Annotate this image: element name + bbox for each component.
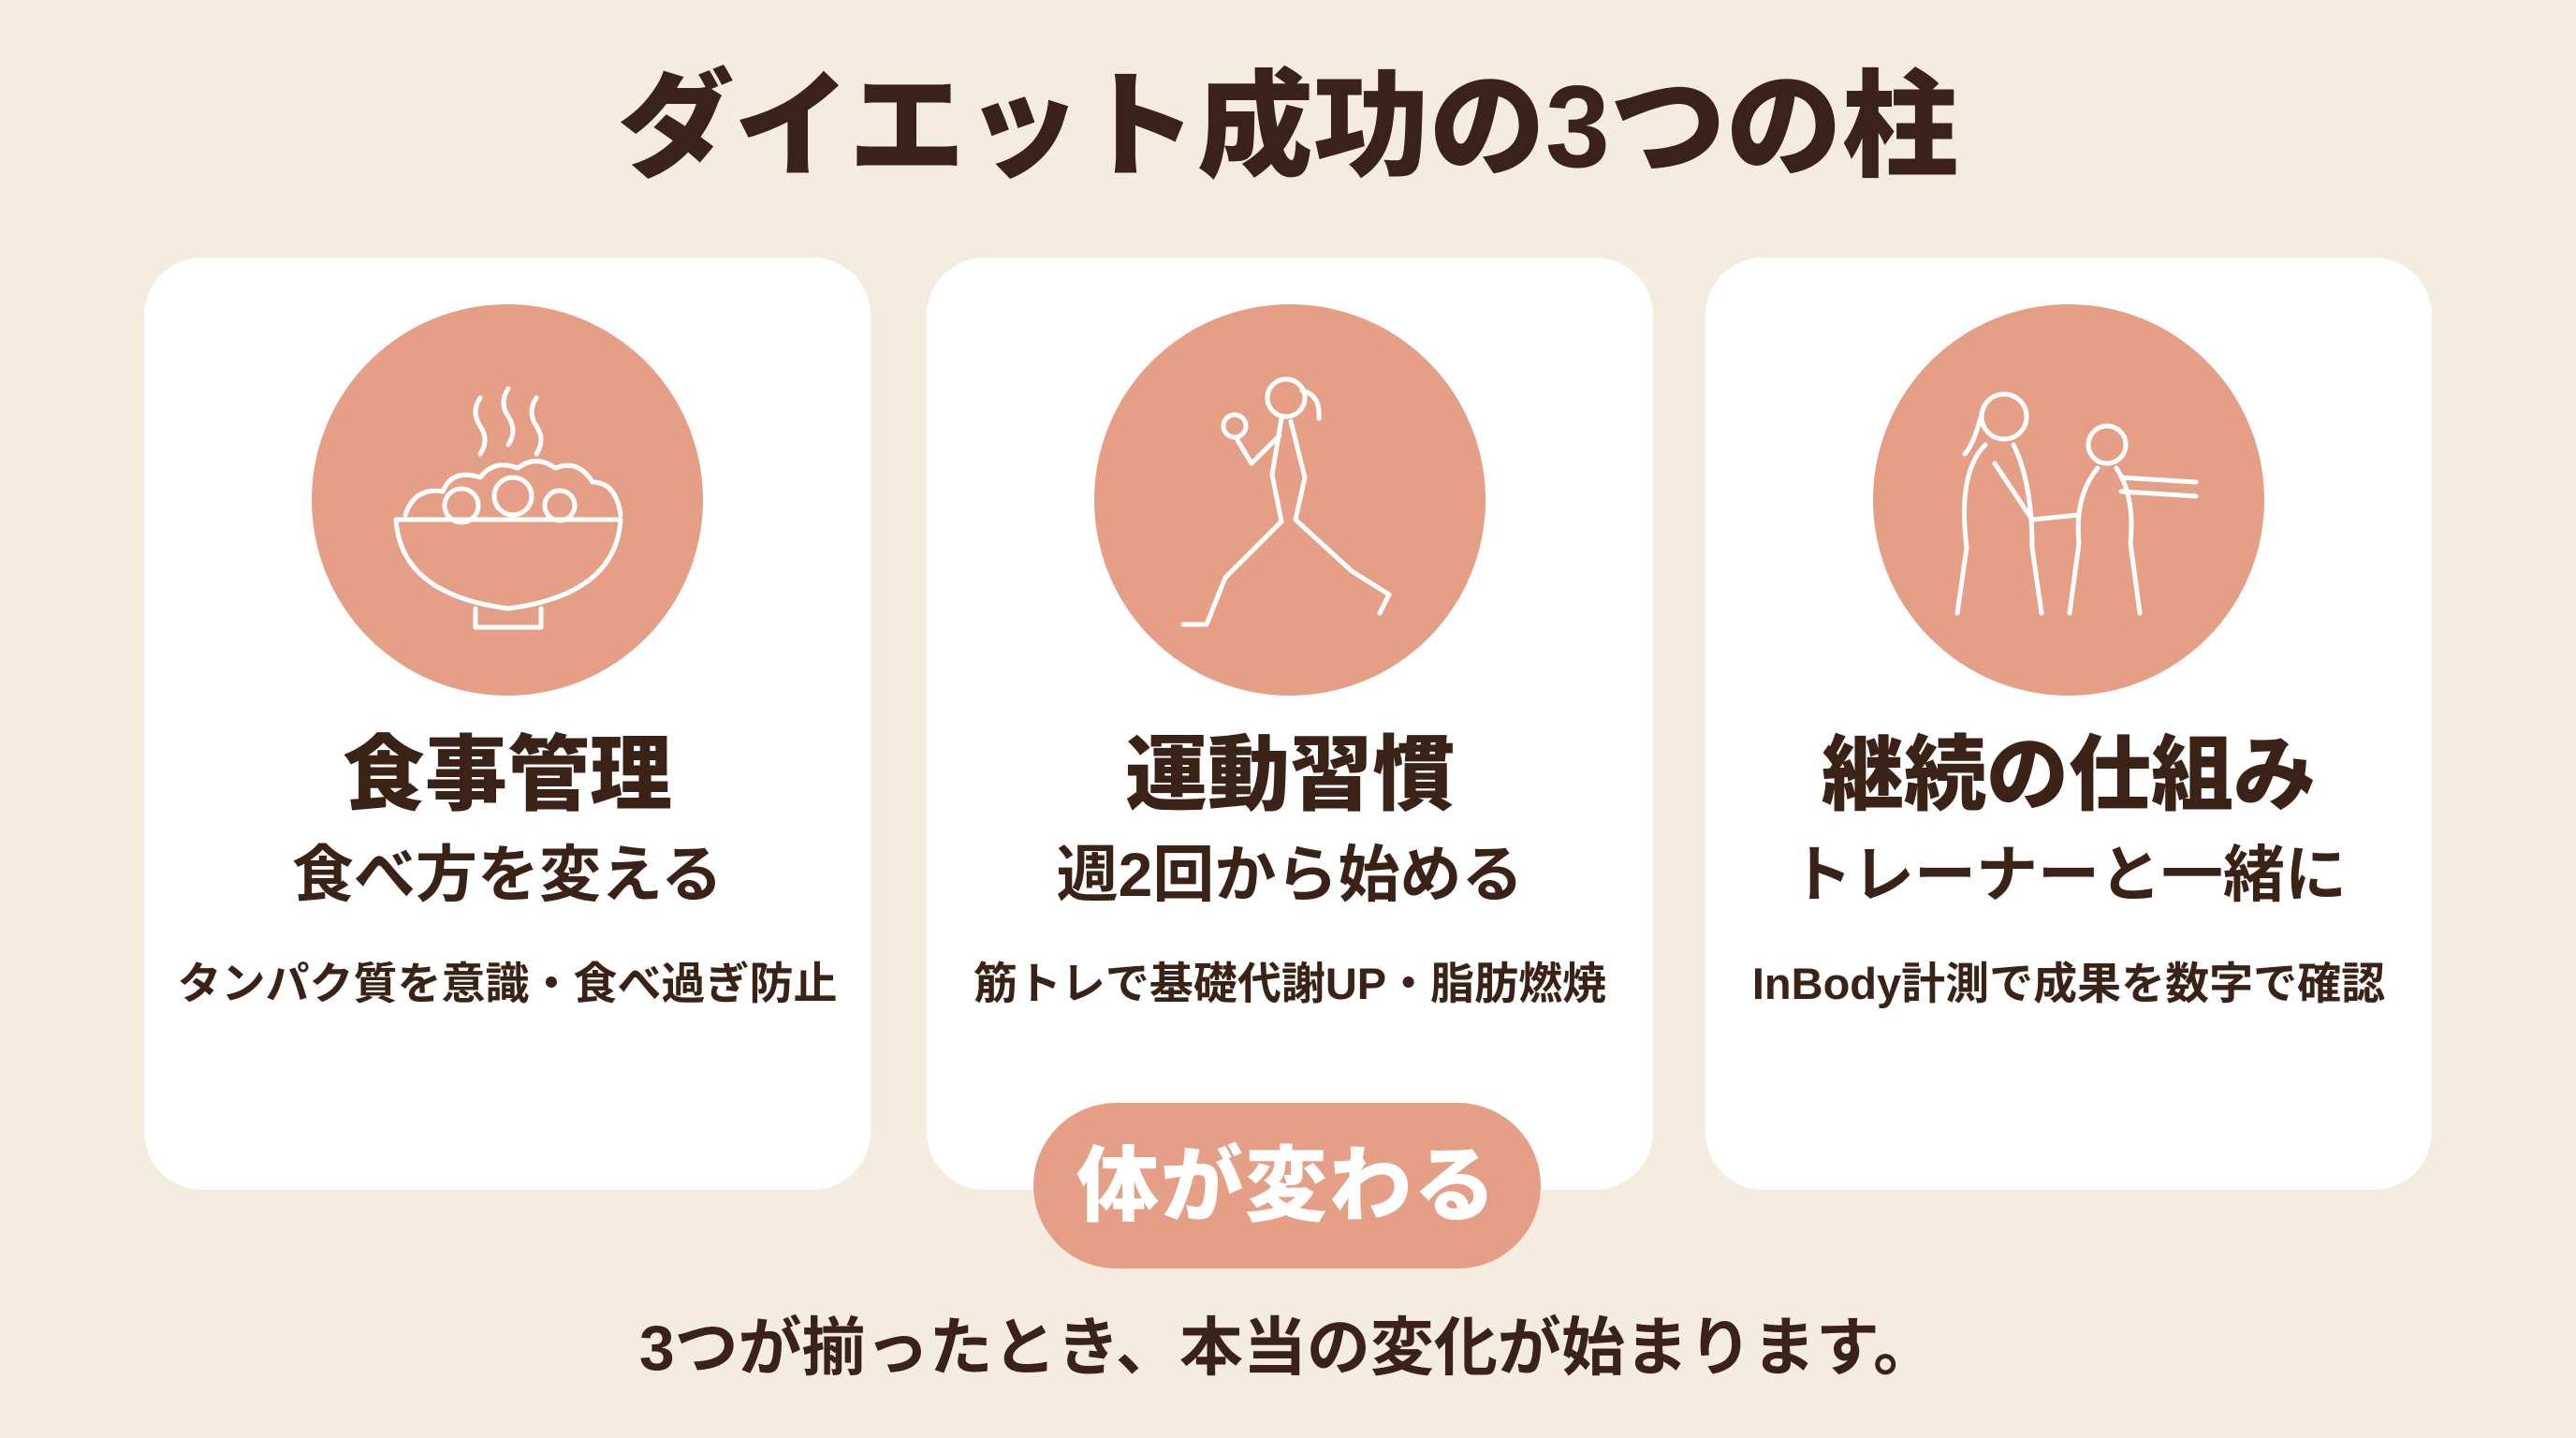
bottom message: 3つが揃ったとき、本当の変化が始まります。 [639,1313,1937,1384]
subheading: 週2回から始める [1057,840,1523,909]
heading: 運動習慣 [1125,728,1455,821]
callout pill: 体が変わる [1076,1139,1498,1232]
title: ダイエット成功の3つの柱 [618,63,1958,192]
icon: trainer and client [1873,304,2264,696]
subheading: 食べ方を変える [292,840,723,909]
heading: 食事管理 [343,728,672,821]
panel: continuation [1705,257,2432,1190]
panel: exercise [927,257,1653,1190]
description: 筋トレで基礎代謝UP・脂肪燃焼 [973,959,1606,1008]
heading: 継続の仕組み [1822,728,2316,821]
description: タンパク質を意識・食べ過ぎ防止 [178,959,837,1008]
subheading: トレーナーと一緒に [1791,840,2347,909]
callout pill [1033,1103,1541,1269]
description: InBody計測で成果を数字で確認 [1752,959,2385,1008]
panel: diet [144,257,871,1190]
icon: salad bowl [312,304,703,696]
icon: lunging woman with dumbbell [1094,304,1486,696]
